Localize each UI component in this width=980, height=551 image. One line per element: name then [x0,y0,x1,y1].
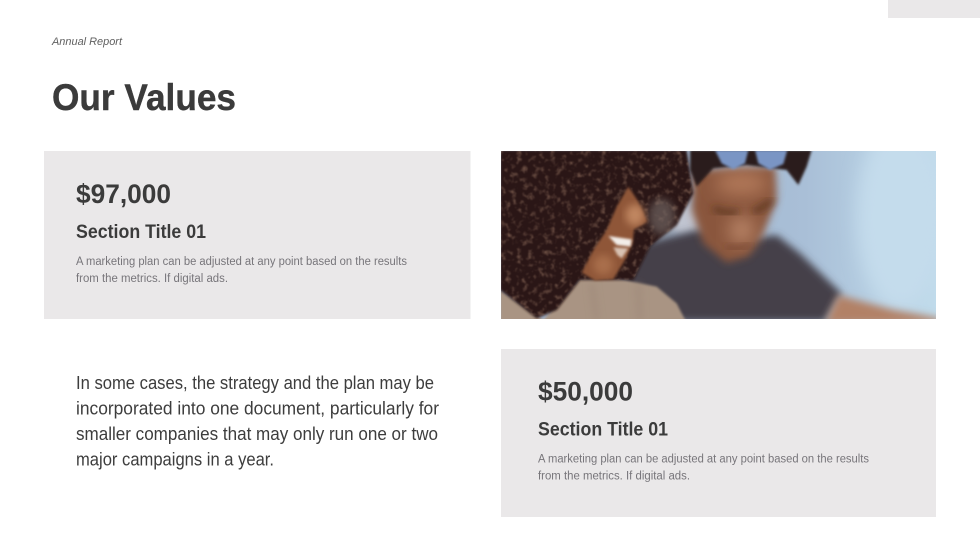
front person's hair [500,150,693,318]
panel: value card 2 [501,349,936,517]
description: A marketing plan can be adjusted at any point based on the results [76,256,407,268]
paragraph: incorporated into one document, particularly for [76,398,439,418]
grey hair puff [648,198,675,235]
paragraph: major campaigns in a year. [76,450,274,470]
light patch between heads [672,206,698,234]
back person's hair [690,150,812,187]
panel: value card 1 [44,151,470,319]
corner tab [888,0,980,18]
smile [608,236,632,247]
amount: $97,000: $97,000 [76,179,171,209]
back person's face [692,167,777,263]
paragraph: smaller companies that may only run one or two [76,424,438,444]
back person's arm [825,295,940,323]
eyebrow: Annual Report: Annual Report [51,36,123,48]
amount: $50,000: $50,000 [538,376,633,406]
paragraph: In some cases, the strategy and the plan may be [76,373,434,393]
back person's shirt [623,230,842,322]
section title: Section Title 01 [538,420,668,440]
photo: two people laughing [501,151,936,319]
paragraph [76,373,439,470]
description: A marketing plan can be adjusted at any point based on the results [538,454,869,466]
description [76,256,407,285]
description: from the metrics. If digital ads. [538,470,690,482]
description: from the metrics. If digital ads. [76,273,228,285]
front person's face [582,187,647,281]
title: Our Values [52,77,236,118]
section title: Section Title 01 [76,222,206,243]
description [538,454,869,482]
front person's top [500,278,686,322]
sunglasses [715,150,787,170]
bright wall area [856,151,914,302]
